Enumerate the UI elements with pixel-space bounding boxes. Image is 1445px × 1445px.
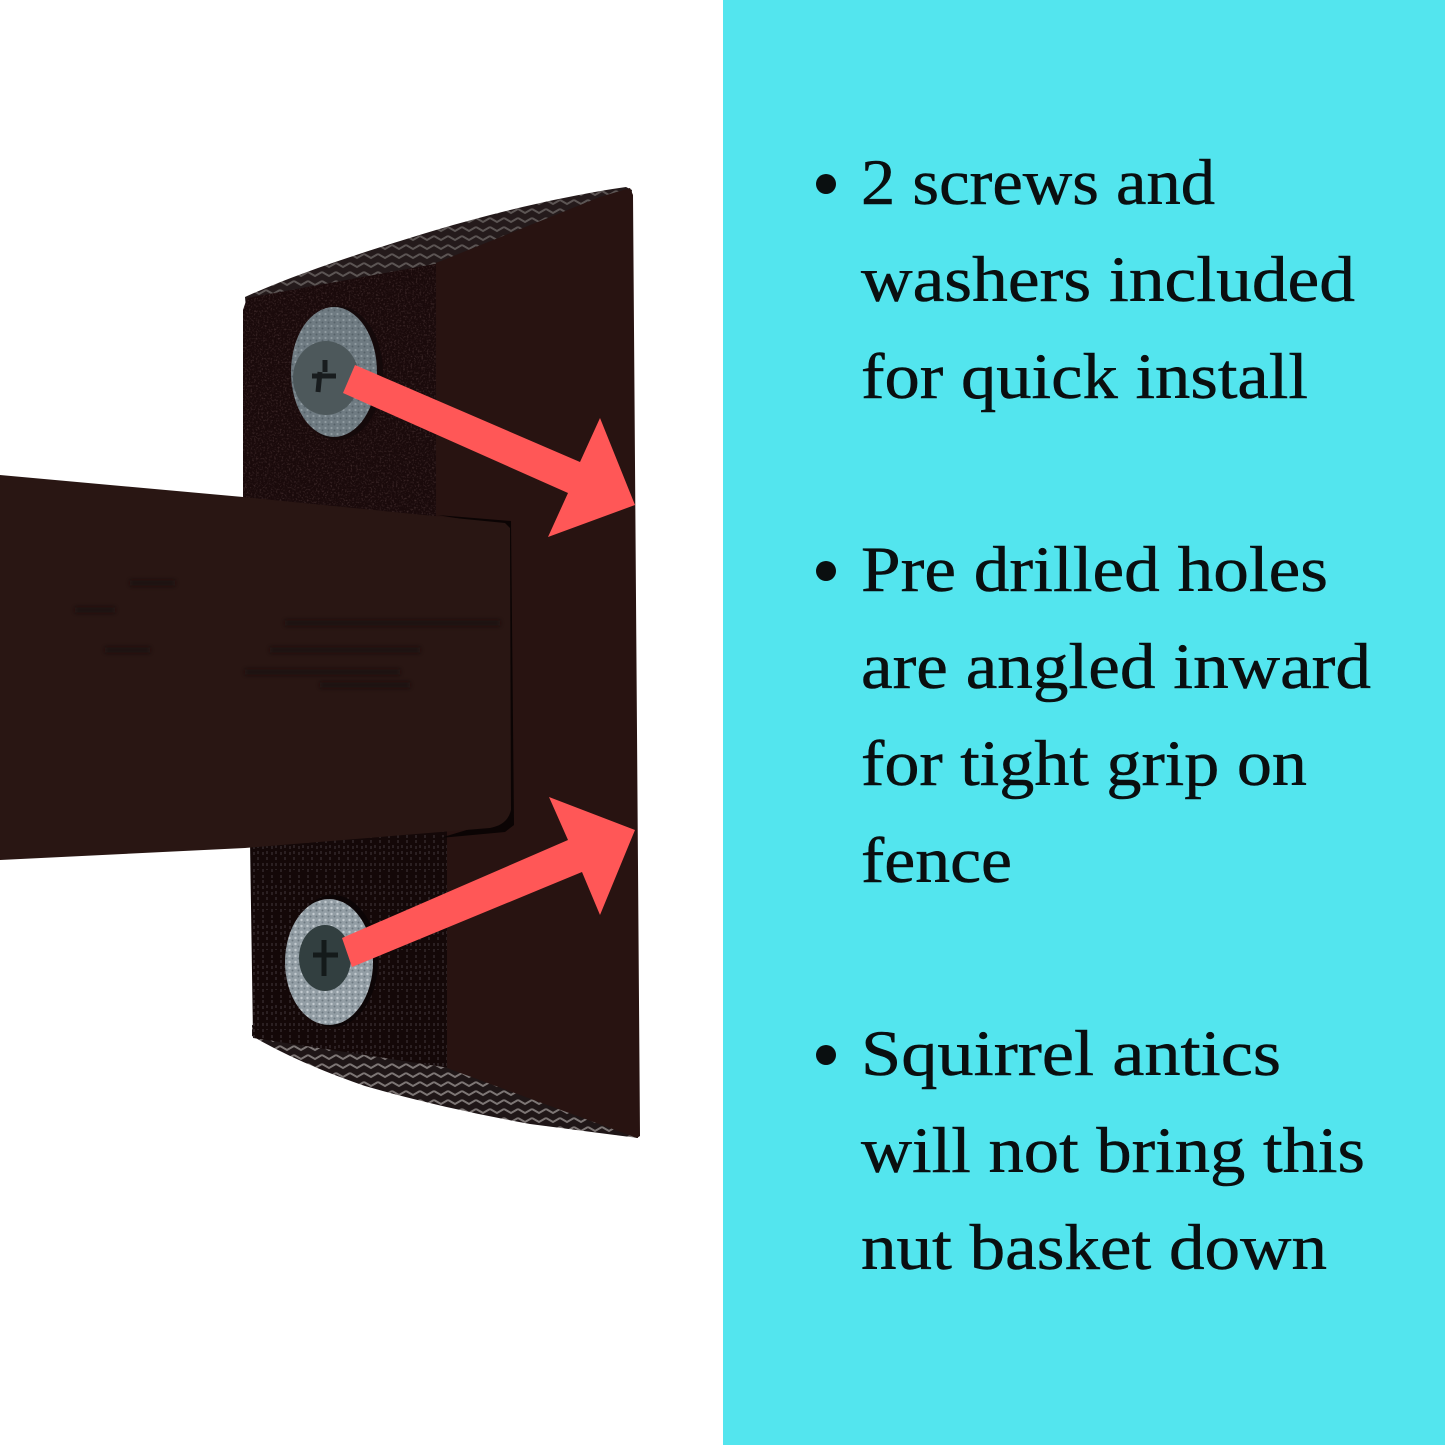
bullet item: screws and washers: washers included [861,244,1355,316]
bullet item: squirrel antics [816,1018,1365,1284]
horizontal beam [0,475,511,860]
bullet item: screws and washers: for quick install [861,341,1308,413]
bullet item: squirrel antics: Squirrel antics [861,1018,1281,1090]
bullet item: pre drilled holes: Pre drilled holes [861,534,1328,606]
upper washer and screw [291,306,383,440]
bullet item: pre drilled holes [816,534,1371,897]
bullet item: screws and washers: 2 screws and [861,147,1215,219]
bullet item: pre drilled holes: for tight grip on [861,728,1307,800]
beam shadow gap [437,515,514,838]
bullet item: pre drilled holes: are angled inward [861,631,1371,703]
bullet item: squirrel antics: will not bring this [861,1115,1365,1187]
beam grain marks [75,583,500,685]
bracket bottom face [252,1025,638,1138]
bullet item: squirrel antics: nut basket down [861,1212,1327,1284]
bracket upper side face [243,263,440,525]
bracket top face [245,187,632,310]
photo: wooden bracket [0,187,640,1138]
bracket front face [436,188,640,1138]
bullet [816,561,836,581]
bullet [816,1045,836,1065]
panel: teal background [723,0,1445,1445]
lower washer and screw [285,895,378,1027]
bracket lower side face [250,825,450,1068]
bullet [816,174,836,194]
bullet item: screws and washers [816,147,1355,413]
bullet item: pre drilled holes: fence [861,825,1012,897]
arrow: lower screw to fence [342,797,635,967]
arrow: upper screw to fence [343,365,635,537]
upper face speckle [243,263,440,525]
